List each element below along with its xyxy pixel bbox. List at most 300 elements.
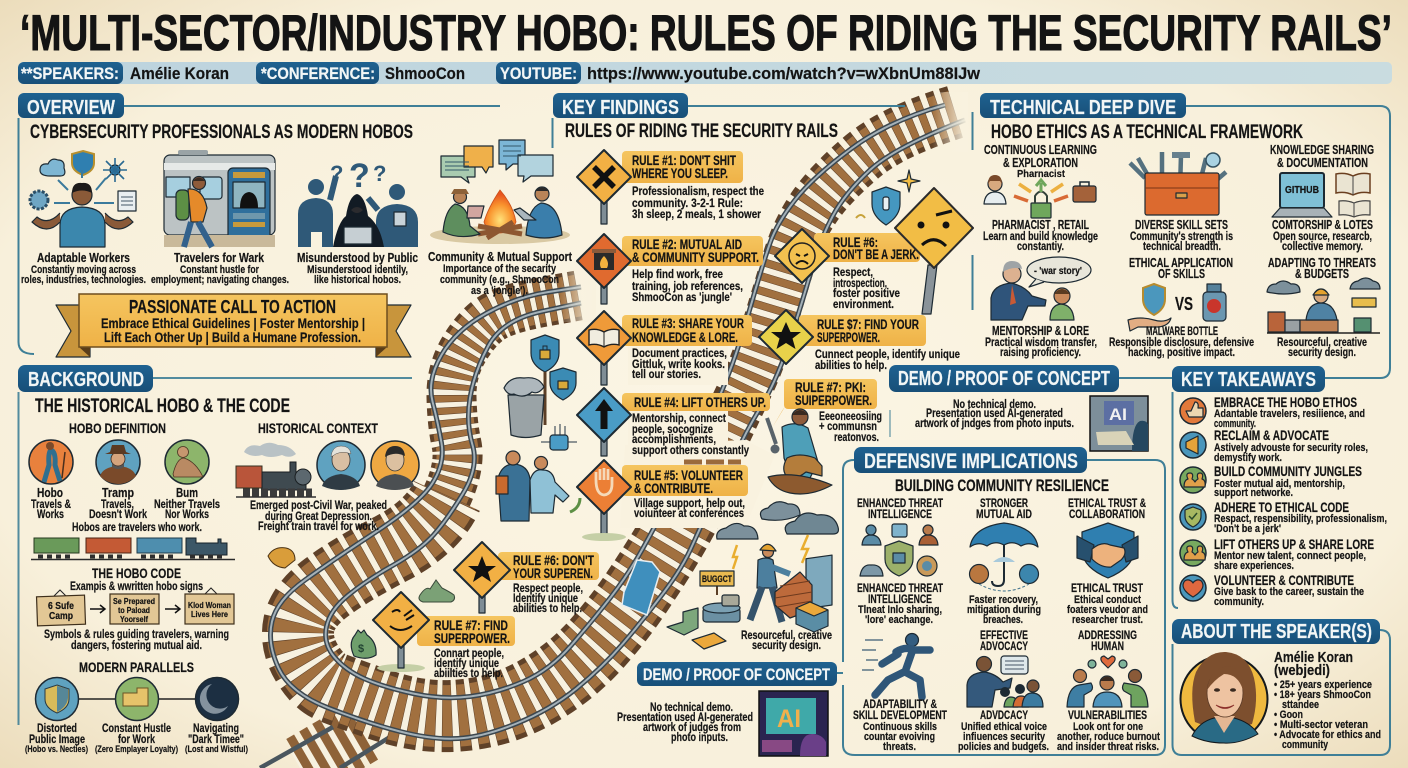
heading: cybersecurity professionals: CYBERSECURITY PROFESSIONALS AS MODERN HOBOS [30, 122, 413, 143]
rule 1: Professionalism, respect the [632, 184, 764, 198]
rule 7 right [759, 310, 960, 372]
takeaway 4: ADHERE TO ETHICAL CODE [1214, 500, 1349, 515]
text: hobo tramp bum definitions: Nor Works [165, 509, 209, 521]
rule 6 lower: RULE #6: DON'T [513, 553, 595, 568]
takeaway 4 [1180, 500, 1387, 535]
panel: key takeaways [1172, 366, 1387, 608]
rule 2: ShmooCon as 'jungle' [632, 290, 732, 304]
text: enhanced threat sharing: 'lore' eachange. [865, 614, 933, 626]
text: adaptability: ADAPTABILITY & [863, 697, 937, 711]
text: community and mutual support: community (e.g., ShmooCon [440, 274, 559, 286]
icon: handshake shield [1077, 523, 1138, 578]
text: pharmacist retail: Learn and build knowledge [983, 231, 1098, 243]
text: historical context: during Great Depression. [265, 509, 372, 523]
rule 6 lower: Identify unique [513, 593, 578, 605]
takeaway 3: Foster mutual aid, mentorship, [1214, 478, 1345, 490]
text: modern parallels labels: "Dark Timee" [188, 732, 244, 746]
text: malware bottle: MALWARE BOTTLE [1146, 326, 1218, 338]
text: stronger recovery [967, 594, 1041, 626]
heading pill: background [18, 365, 153, 392]
rule 7 right: SUPERPOWER. [817, 330, 880, 345]
rule 2: RULE #2: MUTUAL AID [632, 237, 742, 252]
subheading: ethical trust [1068, 496, 1146, 521]
rule 5: voiunteer at conferences [634, 506, 744, 520]
hobo sign: kind woman: Lives Here [191, 609, 228, 619]
takeaway 1: community. [1214, 418, 1256, 430]
rule 4: RULE #4: LIFT OTHERS UP. [634, 395, 766, 410]
text: speaker bio: community [1282, 739, 1329, 751]
text: effective advocacy: ADVOCACY [980, 639, 1028, 653]
text: modern parallels labels: (Lost and Wistful) [185, 744, 248, 755]
heading pill: defensive implications: DEFENSIVE IMPLICATIONS [864, 450, 1078, 473]
text: demo lower: artwork of judges from [643, 720, 741, 734]
icon: github laptop and books [1272, 173, 1370, 217]
icon: shield vs malware bottle: VS [1175, 294, 1193, 314]
text: community and mutual support: as a 'jongle'). [471, 285, 528, 297]
text: hobo tramp bum definitions: Hobos are travelers who work. [72, 522, 202, 534]
icon: adapting builder [1267, 278, 1380, 333]
text: advocacy: ADVDCACY [980, 708, 1028, 722]
takeaway 2 [1180, 428, 1368, 464]
icon: money bag: $ [358, 643, 364, 655]
text: resourceful creative deep dive [1277, 337, 1367, 359]
rule 7 callout with kneeling figure [767, 379, 882, 494]
icon: toolbox [1130, 152, 1226, 215]
rule 1: community. 3-2-1 Rule: [632, 196, 743, 210]
text: adaptability [853, 697, 947, 753]
text: resourceful creative security design: Resourceful, creative [741, 628, 832, 642]
icon: adaptable worker [30, 151, 136, 247]
text: mentorship and lore [985, 324, 1097, 359]
rule 7 lower: identify unique [434, 658, 499, 670]
icon: two travelers walking [496, 451, 580, 521]
text: resourceful creative deep dive: Resourceful, creative [1277, 337, 1367, 349]
text: advocacy: Unified ethical voice [961, 721, 1047, 733]
takeaway 3: support networke. [1214, 487, 1293, 499]
text: hobo tramp bum definitions: Travels, [101, 499, 134, 511]
text: modern parallels labels: Navigating [193, 721, 239, 735]
arrow: sign two to three [165, 605, 180, 613]
hobo sign: be prepared: Yoorself [120, 614, 148, 624]
panel: demo proof of concept lower [617, 662, 837, 756]
metadata bar: **SPEAKERS: [21, 64, 119, 83]
metadata bar: https://www.youtube.com/watch?v=wXbnUm88IJw [587, 64, 981, 83]
text: travelers: Constant hustle for [180, 264, 260, 276]
text: hobo tramp bum definitions: Works [37, 509, 64, 521]
text: resourceful creative deep dive: security design. [1288, 347, 1356, 359]
subheading: ethical trust: COLLABORATION [1069, 507, 1145, 521]
text: misunderstood: Misunderstood by Public [297, 251, 418, 265]
rule 6 right: RULE #6: [833, 235, 878, 250]
panel: background [18, 365, 419, 755]
takeaway 2: RECLAIM & ADVOCATE [1214, 428, 1329, 443]
text: pharmacist retail: constantiy. [1017, 241, 1064, 253]
text: demo upper: Presentation used AI-generated [926, 406, 1063, 420]
icon: shield and sparkle [856, 170, 920, 225]
rule 6 lower: Respect people, [513, 583, 583, 595]
text: adaptable workers: Adaptable Workers [37, 251, 130, 265]
heading pill: overview: OVERVIEW [27, 97, 115, 119]
heading pill: demo upper: DEMO / PROOF OF CONCEPT [898, 368, 1110, 390]
icon: circuit chip [541, 424, 577, 450]
text: demo upper [915, 397, 1074, 430]
subheading: hobo code: THE HOBO CODE [92, 565, 181, 581]
text: advocacy: policies and budgets. [958, 741, 1049, 753]
text: demo lower: Presentation used AI-generated [617, 710, 753, 724]
metadata bar: *CONFERENCE: [261, 64, 375, 83]
text: adaptable workers: Constantiy moving across [31, 264, 136, 276]
text: comtorship and lotes [1272, 218, 1373, 253]
text: hobo tramp bum definitions: Bum [176, 486, 198, 500]
icon: freight train [31, 538, 235, 560]
text: vulnerabilities [1057, 708, 1160, 753]
text: addressing human [1078, 628, 1137, 653]
hobo sign: be prepared: Se Prepared [113, 596, 155, 606]
rule 1: 3h sleep, 2 meals, 1 shower [632, 207, 761, 221]
text: mentorship and lore: raising proficiency. [1000, 347, 1081, 359]
rule 1: WHERE YOU SLEEP. [632, 166, 728, 181]
subheading: stronger mutual aid: STRONGER [980, 496, 1028, 510]
text: mentorship and lore: MENTORSHIP & LORE [992, 324, 1089, 338]
text: knowledge sharing: & DOCUMENTATION [1277, 156, 1368, 170]
heading pill: technical deep dive: TECHNICAL DEEP DIVE [990, 97, 1176, 119]
takeaway 6 [1180, 573, 1364, 608]
text: addressing human: ADDRESSING [1078, 628, 1137, 642]
icon: big jerk warning sign [895, 188, 973, 314]
rule 6 lower: abilities to help. [513, 603, 582, 615]
text: adaptability: Continuous skills [863, 721, 937, 733]
rule 7 callout with kneeling figure: + communsn [819, 421, 877, 433]
metadata bar [18, 62, 1392, 84]
text: historical context: Emerged post-Civil War, peaked [250, 498, 387, 512]
subheading: stronger mutual aid [976, 496, 1032, 521]
rule 6 right: environment. [833, 297, 894, 311]
text: speaker bio: Amélie Koran [1274, 649, 1353, 666]
text: demo lower: No technical demo. [650, 700, 733, 714]
text: travelers: employment; navigating changes. [151, 274, 289, 286]
hobo sign: safe camp [37, 590, 86, 626]
takeaway 1: Adantable travelers, resiiience, and [1214, 408, 1365, 420]
takeaway 4: 'Don't be a jerk' [1214, 523, 1281, 535]
text: knowledge sharing [1270, 143, 1374, 170]
text: diverse skill sets: Community's strength is [1130, 231, 1233, 243]
metadata bar: ShmooCon [385, 64, 465, 83]
icon: traveler and train [164, 150, 275, 247]
text: community and mutual support: Community & Mutual Support [428, 250, 573, 264]
subheading: ethical trust: ETHICAL TRUST & [1068, 496, 1146, 510]
text: vulnerabilities: and insider threat risks. [1057, 741, 1159, 753]
rule 2: training, job references, [632, 279, 743, 293]
subheading: enhanced threat intelligence: ENHANCED THREAT [857, 496, 943, 510]
text: modern parallels labels: (Hobo vs. Necties) [25, 744, 88, 755]
text: misunderstood: like historical hobos. [314, 274, 401, 286]
metadata bar: Amélie Koran [130, 64, 229, 83]
text: demo upper: No technical demo. [953, 397, 1036, 411]
text: hobo tramp bum definitions: Neither Travels [154, 499, 220, 511]
rule 7 lower [373, 592, 515, 680]
metadata bar: YOUTUBE: [500, 64, 577, 83]
text: speaker bio: • 25+ years experience [1274, 679, 1372, 691]
rule 6 right: DON'T BE A JERK. [833, 247, 919, 262]
text: ethical application: ETHICAL APPLICATION [1129, 256, 1233, 270]
rule 2 [577, 234, 763, 304]
icon: advocacy speaker [967, 656, 1043, 707]
text: malware bottle: hacking, positive impact. [1128, 347, 1235, 359]
icon: bum [165, 440, 209, 484]
panel: key findings [373, 93, 1390, 756]
rule 6 right [775, 229, 920, 311]
icon: money bags in loop [419, 580, 455, 602]
subheading: stronger mutual aid: MUTUAL AID [976, 507, 1032, 521]
heading: rules of riding: RULES OF RIDING THE SECURITY RAILS [565, 121, 838, 142]
text: enhanced threat sharing [857, 581, 943, 626]
text: community and mutual support: Importance of the secarity [443, 263, 557, 275]
text: stronger recovery: breaches. [983, 614, 1023, 626]
text: ethical application: OF SKILLS [1158, 267, 1205, 281]
rule 6 lower [454, 542, 599, 615]
text: advocacy [958, 708, 1049, 753]
text: speaker bio: (webjedi) [1274, 662, 1330, 679]
text: ethical trust: researcher trust. [1072, 614, 1143, 626]
banner: passionate call to action: PASSIONATE CALL TO ACTION [129, 297, 336, 317]
subheading: historical context: HISTORICAL CONTEXT [258, 420, 378, 436]
icon: campfire community [430, 140, 570, 244]
heading pill: demo lower: DEMO / PROOF OF CONCEPT [643, 665, 830, 684]
icon: blue tarp on track [622, 560, 660, 615]
icon: shields on pole and bin [504, 335, 576, 438]
text: ethical application [1129, 256, 1233, 281]
heading pill: key takeaways [1172, 366, 1325, 392]
rule 6 right: foster positive [833, 286, 900, 300]
text: diverse skill sets: technical breadth. [1143, 241, 1221, 253]
hobo sign: be prepared: to Paload [118, 605, 150, 615]
portrait: historical figure one [317, 441, 365, 490]
rule 5: & CONTRIBUTE. [634, 481, 713, 496]
icon: money bag [351, 630, 376, 658]
text: demo lower: photo inputs. [671, 730, 728, 744]
image: AI artwork upper: AI [1109, 405, 1127, 424]
text: stronger recovery: mitigation during [967, 604, 1041, 616]
text: resourceful creative security design: security design. [752, 638, 821, 652]
icon: misunderstood figures: ? [330, 161, 343, 186]
text: demo upper: artwork of jndges from photo inputs. [915, 416, 1074, 430]
timeline: modern parallels [36, 678, 238, 720]
text: travelers: Travelers for Wark [174, 251, 264, 265]
text: vulnerabilities: another, roduce burnout [1057, 731, 1160, 743]
text: resourceful creative security design [741, 628, 832, 652]
icon: runner [862, 634, 930, 697]
text: hobo tramp bum definitions: Hobo [37, 486, 63, 500]
hobo sign: be prepared [110, 594, 159, 624]
rule 4: support others constantly [632, 443, 749, 457]
subheading: enhanced threat intelligence [857, 496, 943, 521]
takeaway 3 [1180, 464, 1362, 499]
rule 3: KNOWLEDGE & LORE. [632, 330, 738, 345]
hobo sign: safe camp: 6 Sufe [48, 601, 74, 612]
text: speaker bio: • Advocate for ethics and [1274, 729, 1381, 741]
text: enhanced threat sharing: Tlneat Inlo sharing, [858, 604, 942, 616]
text: demo lower [617, 700, 753, 744]
icon: mentor and child with war story [991, 257, 1091, 320]
rule 6 right: Respect, [833, 265, 873, 279]
text: symbols and rules: dangers, fostering mutual aid. [71, 638, 202, 652]
text: misunderstood [297, 251, 418, 286]
text: enhanced threat sharing: ENHANCED THREAT [857, 581, 943, 595]
text: hobo tramp bum definitions: Doesn't Work [89, 509, 147, 521]
text: adaptability: SKILL DEVELOPMENT [853, 708, 947, 722]
text: symbols and rules [44, 627, 229, 652]
banner: passionate call to action: Embrace Ethical Guidelines | Foster Mentorship | [101, 315, 365, 331]
text: community and mutual support [428, 250, 573, 297]
text: modern parallels labels: Distorted [37, 721, 77, 735]
rule 4: people, socognize [632, 422, 713, 436]
takeaway 5: Mentor new talent, connect people, [1214, 550, 1366, 562]
rule 7 right: RULE $7: FIND YOUR [817, 317, 919, 332]
text: speaker bio: • 18+ years ShmooCon [1274, 689, 1371, 701]
text: stronger recovery: Faster recovery, [969, 594, 1038, 606]
text: travelers [151, 251, 289, 286]
text: effective advocacy [980, 628, 1028, 653]
text: historical context: Freight train travel for work. [258, 519, 379, 533]
text: ethical trust [1067, 581, 1148, 626]
portrait: Amélie Koran [1180, 652, 1268, 743]
rule 1 [577, 150, 764, 224]
text: adaptable workers: roles, industries, technologies. [21, 274, 146, 286]
rule 6 right: introspection, [833, 276, 887, 290]
rule 7 right: abilities to help. [815, 358, 887, 372]
rule 3: tell our stories. [632, 367, 701, 381]
rule 7 lower: RULE #7: FIND [434, 618, 508, 633]
text: adaptable workers [21, 251, 146, 286]
takeaway 2: demystify work. [1214, 452, 1282, 464]
icon: github laptop and books: GITHUB [1285, 185, 1319, 196]
heading: hobo ethics: HOBO ETHICS AS A TECHNICAL FRAMEWORK [991, 122, 1303, 143]
icon: shield vs malware bottle [1128, 284, 1226, 331]
icon: threat intelligence network [860, 524, 938, 576]
takeaway 1: EMBRACE THE HOBO ETHOS [1214, 395, 1357, 410]
text: modern parallels labels: Constant Hustle [102, 721, 171, 735]
banner: passionate call to action [56, 294, 411, 357]
text: speaker bio: • Multi-sector veteran [1274, 719, 1368, 731]
rule 6 lower: YOUR SUPEREN. [513, 566, 593, 581]
icon: storm and builder [667, 502, 838, 649]
text: modern parallels labels: (Zero Emplayer Loyalty) [95, 744, 178, 755]
icon: misunderstood figures [298, 157, 418, 247]
panel: defensive implications [837, 447, 1165, 755]
text: hobo tramp bum definitions [31, 486, 220, 534]
text: effective advocacy: EFFECTIVE [980, 628, 1028, 642]
takeaway 2: Astively advouste for security roles, [1214, 442, 1368, 454]
heading: historical hobo: THE HISTORICAL HOBO & THE CODE [35, 396, 290, 417]
text: enhanced threat sharing: INTELLIGENCE [868, 592, 932, 606]
subheading: modern parallels: MODERN PARALLELS [79, 659, 194, 675]
rule 7 lower: abiilties to help. [434, 668, 503, 680]
rule 3: Gittluk, write kooks. [632, 357, 725, 371]
rule 7 lower: Connart people, [434, 648, 504, 660]
rule 7 callout with kneeling figure: Eeeoneeosiing [819, 411, 882, 423]
rule 3: Document practices, [632, 346, 727, 360]
rule 7 callout with kneeling figure: RULE #7: PKI: [795, 380, 866, 395]
icon: misunderstood figures: ? [349, 157, 370, 195]
text: speaker bio [1274, 649, 1381, 751]
subheading: continuous learning [984, 143, 1097, 180]
rule 4: accomplishments, [632, 432, 716, 446]
text: historical context [250, 498, 387, 533]
text: ethical trust: ETHICAL TRUST [1071, 581, 1144, 595]
text: ethical trust: foaters veudor and [1067, 604, 1148, 616]
heading pill: demo lower [637, 662, 837, 686]
text: malware bottle: Responsible disclosure, defensive [1109, 337, 1254, 349]
panel: overview [18, 93, 573, 357]
text: modern parallels labels [25, 721, 248, 755]
text: comtorship and lotes: Open source, researcb, [1273, 231, 1372, 243]
panel: demo proof of concept upper [889, 365, 1172, 451]
panel: about the speaker [1172, 619, 1390, 755]
rule 5: RULE #5: VOLUNTEER [634, 468, 743, 483]
text: ethical trust: Ethical conduct [1074, 594, 1141, 606]
rule 7 callout with kneeling figure: SUIPERPOWER. [795, 393, 872, 408]
rule 2: Help find work, free [632, 267, 723, 281]
takeaway 1 [1180, 395, 1365, 430]
panel: technical deep dive [972, 93, 1390, 378]
icon: storm and builder: BUGGCT [702, 574, 732, 585]
takeaway 5 [1180, 537, 1374, 572]
railway track [260, 92, 968, 768]
text: diverse skill sets [1130, 218, 1233, 253]
text: addressing human: HUMAN [1091, 639, 1124, 653]
text: advocacy: infiuences security [963, 731, 1046, 743]
icon: bindle on the ground [268, 548, 295, 568]
hobo sign: kind woman [185, 588, 234, 624]
subheading: continuous learning: & EXPLORATION [1003, 156, 1078, 170]
rule 7 right: Cunnect people, identify unique [815, 347, 960, 361]
text: speaker bio: sttandee [1282, 699, 1319, 711]
text: vulnerabilities: Look ont for one [1073, 721, 1143, 733]
takeaway 6: community. [1214, 596, 1264, 608]
rule 4 [577, 388, 770, 457]
subheading: hobo definition: HOBO DEFINITION [69, 420, 166, 436]
text: speaker bio: • Goon [1274, 709, 1303, 721]
text: mentorship and lore: Practical wisdom transfer, [985, 337, 1097, 349]
icon: supporting group [1067, 656, 1148, 707]
icon: steam locomotive [236, 443, 316, 497]
icon: mentor and child with war story: - 'war story' [1034, 265, 1082, 277]
image: AI artwork lower [759, 691, 828, 756]
rule 4: Mentorship, connect [632, 411, 726, 425]
image: AI artwork lower: AI [777, 705, 801, 733]
text: adapting to threats [1268, 256, 1376, 281]
takeaway 6: VOLUNTEER & CONTRIBUTE [1214, 573, 1354, 588]
banner: passionate call to action: Lift Each Other Up | Build a Humane Profession. [104, 329, 361, 345]
takeaway 5: share experiences. [1214, 560, 1294, 572]
text: vulnerabilities: VULNERABILITIES [1068, 708, 1147, 722]
icon: tramp [96, 440, 140, 484]
icon: pharmacist lock briefcase [984, 175, 1096, 218]
hobo sign: kind woman: Klod Woman [188, 600, 231, 610]
text: adapting to threats: & BUDGETS [1295, 267, 1349, 281]
rule 3: RULE #3: SHARE YOUR [632, 316, 744, 331]
heading pill: demo upper [889, 365, 1119, 392]
subheading: enhanced threat intelligence: INTELLIGENCE [868, 507, 932, 521]
rule 1: RULE #1: DON'T SHIT [632, 153, 737, 168]
takeaway 6: Give bask to the career, sustain the [1214, 586, 1364, 598]
text: modern parallels labels: Public Image [29, 732, 85, 746]
text: hobo tramp bum definitions: Tramp [102, 486, 134, 500]
vertical connector [889, 410, 891, 437]
text: malware bottle [1109, 326, 1254, 359]
heading pill: background: BACKGROUND [28, 369, 144, 391]
text: adaptability: countar evoiving [864, 731, 935, 743]
